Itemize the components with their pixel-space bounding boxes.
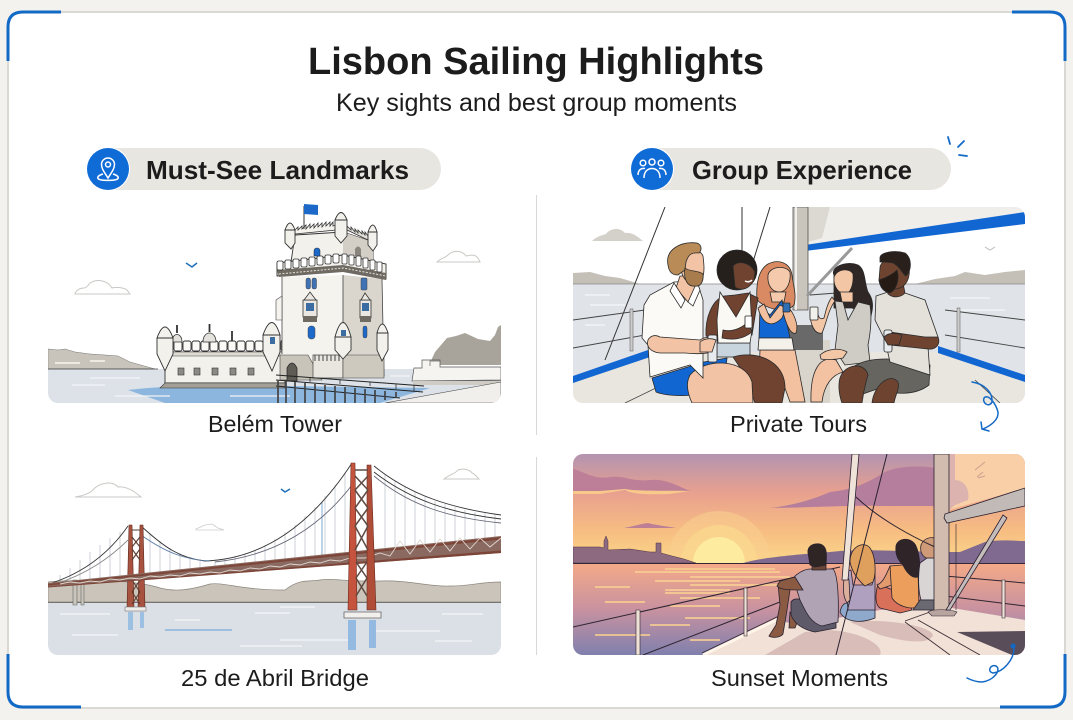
hills <box>573 272 640 284</box>
illustration: Private Tours <box>573 207 1025 403</box>
flag <box>304 206 305 229</box>
distant hills <box>48 579 501 602</box>
deck <box>703 606 1025 655</box>
small tower <box>125 525 146 611</box>
city silhouette <box>573 536 696 563</box>
clouds <box>75 281 130 294</box>
bird <box>186 263 197 267</box>
icon: group of people <box>638 159 666 178</box>
clouds <box>573 469 690 492</box>
bird <box>985 247 995 250</box>
quay wedge <box>385 382 501 403</box>
sparkle accent <box>948 137 967 156</box>
water <box>48 369 501 403</box>
bastion domes <box>172 324 232 342</box>
main tower <box>344 463 381 618</box>
icon: map pin <box>98 158 118 180</box>
boom vang strut <box>946 515 1007 610</box>
mast and forestay <box>842 454 859 580</box>
clouds <box>75 483 141 497</box>
bastion merlons <box>174 340 296 351</box>
title: Lisbon Sailing Highlights <box>308 41 764 83</box>
column divider <box>536 195 538 655</box>
main cables <box>52 463 501 584</box>
sail and boom <box>805 207 1025 245</box>
swirl arrow <box>972 382 998 431</box>
bastion windows <box>178 368 254 375</box>
illustration: Sunset Moments <box>573 454 1025 655</box>
bridge deck <box>48 536 501 587</box>
walkway pier <box>276 375 424 398</box>
label: Private Tours: Private Tours <box>730 411 867 437</box>
sun and halo <box>667 511 771 615</box>
main sail <box>949 454 1025 510</box>
heading: Group Experience: Group Experience <box>692 155 912 185</box>
person: woman with dark hair <box>876 539 930 613</box>
person: woman with blonde hair <box>840 545 875 621</box>
boom <box>944 488 1025 523</box>
enclosed balconies <box>303 292 371 318</box>
tower reflections <box>128 612 144 630</box>
person: man in grey tee <box>769 544 838 637</box>
railings <box>573 292 1025 348</box>
mast <box>793 207 808 310</box>
sun reflection <box>595 569 790 640</box>
swirl accent <box>967 644 1016 682</box>
approach piers <box>73 580 84 605</box>
water <box>573 284 1025 376</box>
person 3: woman with red hair <box>757 262 805 402</box>
heading: Must-See Landmarks <box>86 147 441 191</box>
deck <box>573 352 1025 403</box>
crenellations top <box>295 222 336 234</box>
sky <box>573 454 1025 564</box>
turrets <box>157 212 388 371</box>
tower lower annex <box>280 355 322 380</box>
subtitle: Key sights and best group moments <box>336 89 737 117</box>
label: Belém Tower: Belém Tower <box>208 411 342 437</box>
hangers <box>60 473 495 582</box>
far shore left <box>48 349 155 369</box>
distant hills <box>743 540 1025 563</box>
person 5: man with beard <box>839 252 939 403</box>
water <box>48 603 501 655</box>
person 1: bearded man <box>642 243 753 403</box>
person 2: woman with afro <box>706 250 785 403</box>
cloud <box>592 229 643 241</box>
blue gunwales <box>573 350 650 383</box>
balcony <box>277 255 386 279</box>
bastion wall <box>165 352 285 383</box>
rigging <box>605 207 770 360</box>
upper terrace <box>291 232 373 262</box>
far shore right with trees <box>430 325 501 365</box>
person: man with glasses <box>913 538 935 610</box>
railings <box>573 567 1025 655</box>
main mast <box>934 454 949 612</box>
label: Sunset Moments: Sunset Moments <box>711 665 888 691</box>
tower windows <box>306 278 367 339</box>
bird <box>281 489 290 492</box>
sea <box>573 564 1025 655</box>
label: 25 de Abril Bridge: 25 de Abril Bridge <box>181 665 369 691</box>
illustration: Belém Tower <box>48 204 501 403</box>
heading: Must-See Landmarks: Must-See Landmarks <box>146 155 409 185</box>
heading: Group Experience <box>630 147 951 191</box>
person 4: woman with dark hair <box>810 263 873 402</box>
illustration: 25 de Abril Bridge <box>48 463 501 655</box>
tower body <box>282 275 342 362</box>
